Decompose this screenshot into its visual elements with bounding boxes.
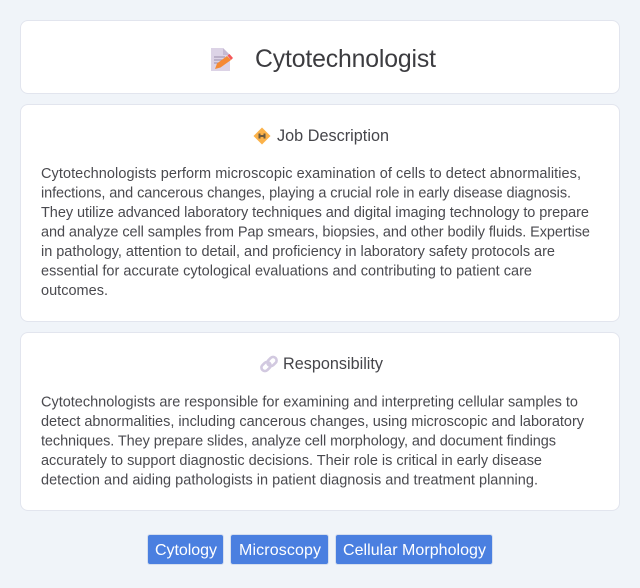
tag: Cytology — [148, 535, 223, 564]
panel: job description — [20, 104, 620, 322]
heading: job description: Job Description — [277, 127, 389, 145]
text: job description body: in pathology, attention to detail, and proficiency in laboratory safety protocols are — [41, 244, 555, 260]
heading: responsibility: Responsibility — [283, 355, 384, 373]
text: responsibility body — [41, 394, 585, 488]
tag: Cellular Morphology: Cellular Morphology — [343, 542, 486, 559]
panel: responsibility — [20, 332, 620, 511]
text: job description body: infections, and cancerous changes, playing a crucial role in early disease diagnosis. — [41, 186, 571, 202]
text: job description body: outcomes. — [41, 283, 108, 299]
tag: Cytology: Cytology — [155, 542, 217, 559]
icon: diamond sign — [254, 128, 270, 144]
text: job description body: essential for accurate cytological evaluations and contributing to patient care — [41, 264, 532, 280]
tag: Microscopy — [231, 535, 328, 564]
text: responsibility body: Cytotechnologists are responsible for examining and interpreting cellular samples to — [41, 394, 578, 410]
icon: chain link — [260, 356, 278, 372]
panel: title card — [20, 20, 620, 94]
text: responsibility body: detection and aiding pathologists in patient diagnosis and treatment planning. — [41, 472, 538, 488]
text: job description body — [41, 166, 590, 299]
text: job description body: Cytotechnologists perform microscopic examination of cells to detect abnormalities, — [41, 166, 581, 182]
text: responsibility body: accurately to support diagnostic decisions. Their role is critical in early disease — [41, 453, 542, 469]
tag: Cellular Morphology — [336, 535, 492, 564]
title: Cytotechnologist — [255, 46, 436, 73]
text: job description body: They utilize advanced laboratory techniques and digital imaging technology to prepare — [41, 205, 589, 221]
text: responsibility body: detect abnormalities, including cancerous changes, using microscopic and laboratory — [41, 414, 585, 430]
tag: Microscopy: Microscopy — [239, 542, 321, 559]
text: responsibility body: techniques. They prepare slides, analyze cell morphology, and document findings — [41, 434, 556, 450]
text: job description body: and analyze cell samples from Pap smears, biopsies, and other bodily fluids. Expertise — [41, 224, 590, 240]
icon: document with pencil — [211, 48, 233, 71]
